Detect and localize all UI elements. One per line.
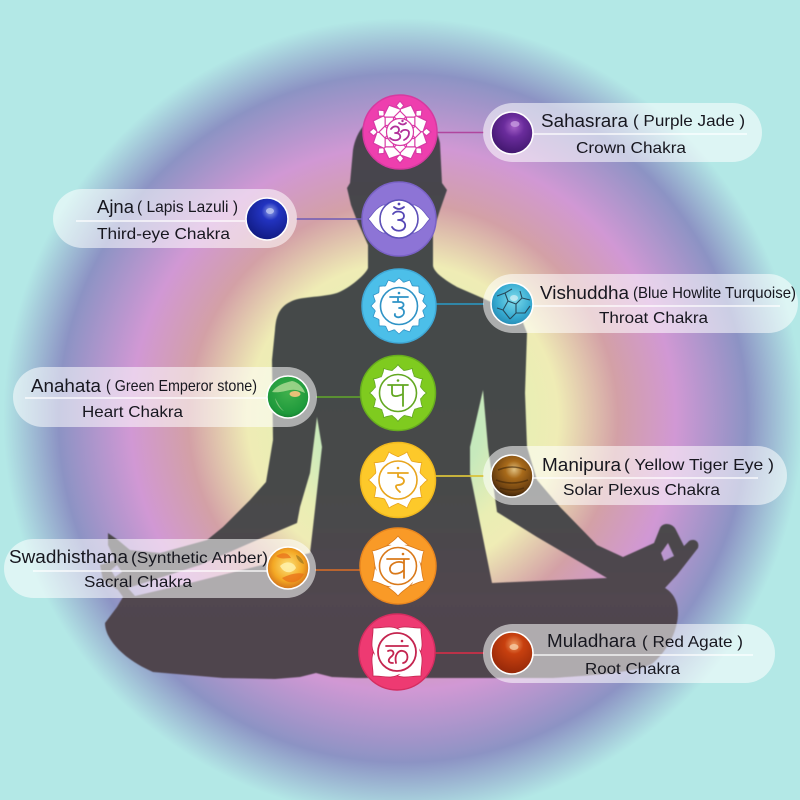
bead: red agate xyxy=(491,632,533,674)
label: Swadhisthana: (Synthetic Amber) xyxy=(131,550,268,567)
icon: Swadhisthana sacral lotus xyxy=(360,528,436,604)
label: Sahasrara: Sahasrara xyxy=(541,110,629,131)
connector: Manipura xyxy=(434,475,484,477)
label: Muladhara: Muladhara xyxy=(547,630,637,651)
label: Ajna xyxy=(53,189,297,248)
label: Ajna: Ajna xyxy=(97,196,135,217)
icon: Sahasrara crown lotus xyxy=(363,95,437,169)
connector: Muladhara xyxy=(433,652,484,654)
bead: blue howlite turquoise xyxy=(491,283,533,325)
label: Manipura xyxy=(483,446,787,505)
label: Muladhara: Root Chakra xyxy=(585,661,680,678)
label: Anahata xyxy=(13,367,317,427)
label: Muladhara xyxy=(483,624,775,683)
bead: lapis lazuli xyxy=(246,198,288,240)
label: Ajna: ( Lapis Lazuli ) xyxy=(137,199,238,216)
label: Manipura: ( Yellow Tiger Eye ) xyxy=(624,457,774,474)
label: Anahata: Heart Chakra xyxy=(82,404,183,421)
label: Muladhara: ( Red Agate ) xyxy=(642,634,743,651)
label: Anahata: Anahata xyxy=(31,375,102,396)
connector: Anahata xyxy=(316,396,363,398)
label: Swadhisthana: Sacral Chakra xyxy=(84,574,192,591)
label: Sahasrara: ( Purple Jade ) xyxy=(633,113,745,130)
label: Swadhisthana: Swadhisthana xyxy=(9,546,129,567)
label: Vishuddha xyxy=(483,274,798,333)
connector: Ajna xyxy=(296,218,364,220)
label: Manipura: Manipura xyxy=(542,454,622,475)
label: Manipura: Solar Plexus Chakra xyxy=(563,482,720,499)
icon: Anahata heart lotus xyxy=(360,356,436,430)
label: Sahasrara: Crown Chakra xyxy=(576,140,686,157)
connector: Sahasrara xyxy=(435,132,484,134)
bead: green emperor stone xyxy=(267,376,309,418)
label: Ajna: Third-eye Chakra xyxy=(97,226,230,243)
icon: Manipura solar plexus lotus xyxy=(360,442,436,518)
label: Sahasrara xyxy=(483,103,762,162)
connector: Vishuddha xyxy=(434,303,484,305)
icon: Muladhara root lotus xyxy=(359,614,435,690)
bead: yellow tiger eye xyxy=(491,455,533,497)
icon: Ajna third-eye xyxy=(362,182,436,256)
icon: Vishuddha throat lotus xyxy=(362,269,436,343)
bead: synthetic amber xyxy=(267,547,309,589)
label: Vishuddha: Throat Chakra xyxy=(599,310,708,327)
label: Anahata: ( Green Emperor stone) xyxy=(106,378,257,395)
bead: purple jade xyxy=(491,112,533,154)
connector: Swadhisthana xyxy=(315,569,362,571)
label: Swadhisthana xyxy=(4,539,316,598)
meditating silhouette xyxy=(100,110,698,679)
label: Vishuddha: Vishuddha xyxy=(540,282,630,303)
